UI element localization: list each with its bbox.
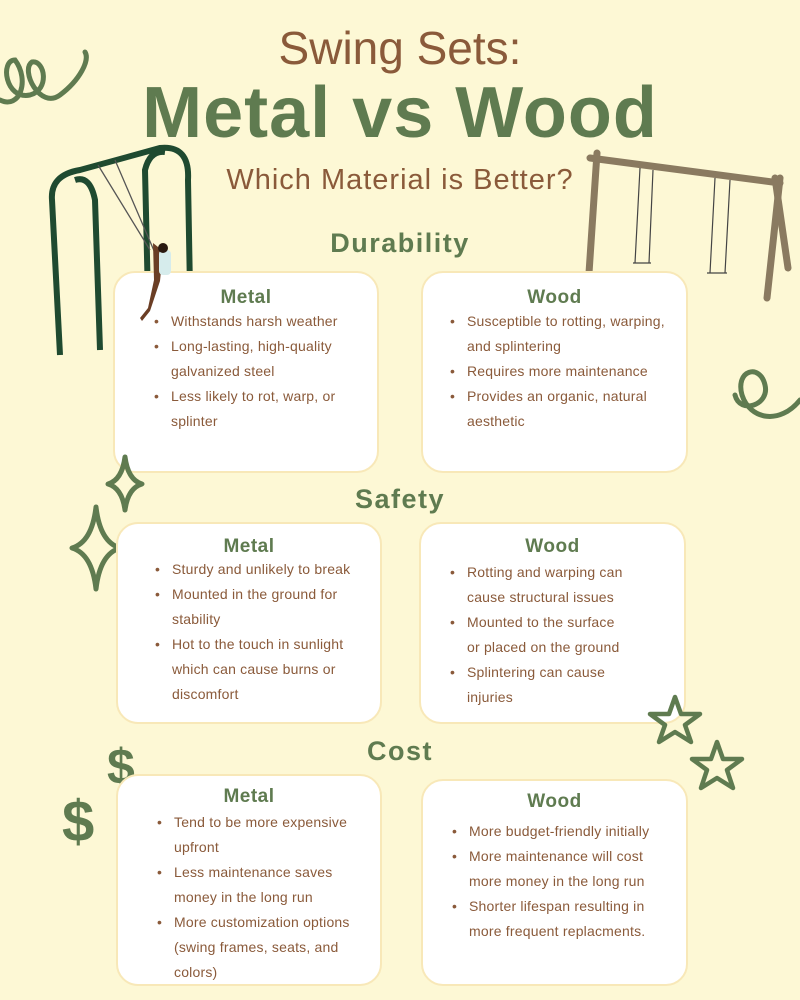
card: durability metal bbox=[113, 271, 379, 473]
card: cost metal: Metal bbox=[223, 786, 275, 807]
card: safety metal: stability bbox=[172, 611, 220, 627]
card: durability metal: Less likely to rot, warp, or bbox=[171, 388, 335, 404]
card: safety wood: Rotting and warping can bbox=[467, 564, 623, 580]
card: durability wood: Requires more maintenance bbox=[467, 363, 648, 379]
heading: Cost: Cost bbox=[367, 736, 433, 766]
card: durability wood: and splintering bbox=[467, 338, 561, 354]
card: cost metal bbox=[116, 774, 382, 986]
card: cost metal: More customization options bbox=[174, 914, 350, 930]
card: durability metal: Withstands harsh weather bbox=[171, 313, 338, 329]
title: Metal vs Wood bbox=[142, 73, 658, 153]
card: durability wood bbox=[421, 271, 688, 473]
title bbox=[142, 22, 658, 196]
card: cost wood: more frequent replacments. bbox=[469, 923, 645, 939]
card: safety wood: injuries bbox=[467, 689, 513, 705]
icon: dollar signs bbox=[62, 739, 135, 854]
card: safety metal bbox=[116, 522, 382, 724]
card: durability metal: galvanized steel bbox=[171, 363, 275, 379]
card: cost metal: Tend to be more expensive bbox=[174, 814, 347, 830]
card: cost wood: Wood bbox=[527, 791, 582, 812]
icon: stars bbox=[648, 694, 744, 790]
card: safety metal: Hot to the touch in sunlight bbox=[172, 636, 343, 652]
illustration: wood swing set bbox=[586, 150, 792, 302]
card: durability metal: splinter bbox=[171, 413, 218, 429]
card: cost metal: upfront bbox=[174, 839, 219, 855]
card: cost metal: colors) bbox=[174, 964, 217, 980]
card: safety metal: Sturdy and unlikely to break bbox=[172, 561, 350, 577]
card: safety wood: or placed on the ground bbox=[467, 639, 620, 655]
card: durability wood: aesthetic bbox=[467, 413, 525, 429]
card: safety wood: Wood bbox=[525, 536, 580, 557]
card: durability metal: Metal bbox=[220, 287, 272, 308]
card: cost wood: More maintenance will cost bbox=[469, 848, 643, 864]
card: durability wood: Provides an organic, natural bbox=[467, 388, 647, 404]
card: durability metal: Long-lasting, high-quality bbox=[171, 338, 332, 354]
card: cost wood: More budget-friendly initially bbox=[469, 823, 649, 839]
icon: dollar signs: $ bbox=[107, 739, 135, 795]
card: safety metal: which can cause burns or bbox=[172, 661, 336, 677]
card: safety wood: Mounted to the surface bbox=[467, 614, 615, 630]
card: cost metal: Less maintenance saves bbox=[174, 864, 332, 880]
heading: Durability: Durability bbox=[330, 228, 470, 258]
card: safety metal: Mounted in the ground for bbox=[172, 586, 337, 602]
card: safety wood: Splintering can cause bbox=[467, 664, 605, 680]
illustration: girl on swing bbox=[140, 243, 171, 321]
card: cost wood bbox=[421, 779, 688, 986]
title: Swing Sets: bbox=[279, 22, 521, 74]
card: safety metal: discomfort bbox=[172, 686, 239, 702]
decorative squiggle right bbox=[732, 369, 800, 419]
illustration: metal swing set bbox=[48, 144, 193, 356]
card: safety wood: cause structural issues bbox=[467, 589, 614, 605]
card: safety wood bbox=[419, 522, 686, 724]
decorative squiggle top-left bbox=[0, 50, 89, 104]
icon: dollar signs: $ bbox=[62, 789, 94, 854]
card: safety metal: Metal bbox=[223, 536, 275, 557]
icon: sparkles bbox=[70, 454, 144, 592]
card: cost metal: (swing frames, seats, and bbox=[174, 939, 339, 955]
card: cost wood: more money in the long run bbox=[469, 873, 645, 889]
card: cost wood: Shorter lifespan resulting in bbox=[469, 898, 644, 914]
card: durability wood: Wood bbox=[527, 287, 582, 308]
card: durability wood: Susceptible to rotting, warping, bbox=[467, 313, 665, 329]
title: Which Material is Better? bbox=[226, 164, 574, 196]
card: cost metal: money in the long run bbox=[174, 889, 313, 905]
heading: Safety: Safety bbox=[355, 484, 445, 514]
